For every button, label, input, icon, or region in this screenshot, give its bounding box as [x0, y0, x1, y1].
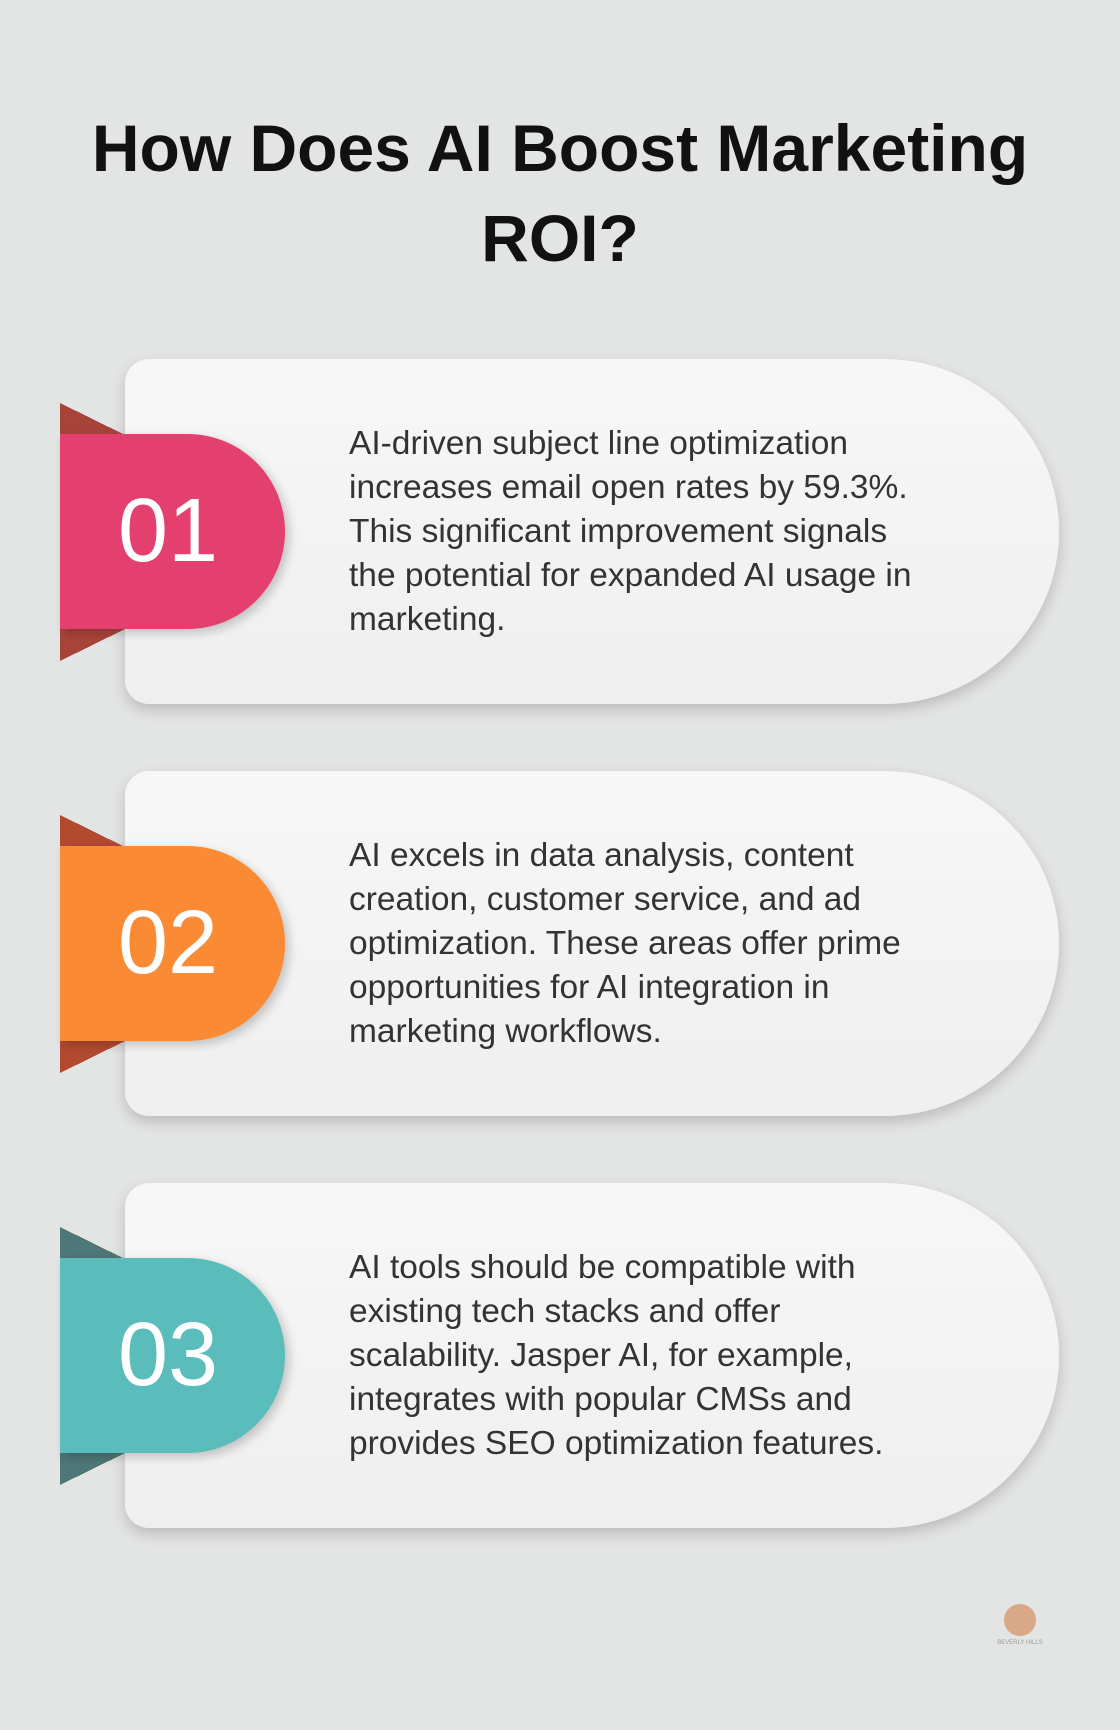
badge 01: 01 [118, 481, 218, 581]
flap top 03 [60, 1227, 125, 1259]
panel: item 02 [60, 771, 1065, 1128]
panel: item 03 [60, 1183, 1065, 1540]
text 02: optimization. These areas offer prime [349, 924, 901, 962]
flap bottom 01 [60, 629, 125, 661]
card 03 [125, 1183, 1059, 1528]
logo [997, 1604, 1043, 1646]
text 02: AI excels in data analysis, content [349, 836, 854, 874]
text 03: provides SEO optimization features. [349, 1424, 883, 1462]
text 02: creation, customer service, and ad [349, 880, 861, 918]
panel: item 01 [60, 359, 1065, 716]
text 03: existing tech stacks and offer [349, 1292, 780, 1330]
flap top 02 [60, 815, 125, 847]
badge 03: 03 [118, 1305, 218, 1405]
text 02 [349, 836, 901, 1050]
flap top 01 [60, 403, 125, 435]
text 02: marketing workflows. [349, 1012, 662, 1050]
text 01: This significant improvement signals [349, 512, 887, 550]
text 03: AI tools should be compatible with [349, 1248, 856, 1286]
badge 02: 02 [118, 893, 218, 993]
title: How Does AI Boost Marketing [92, 111, 1028, 185]
logo: BEVERLY HILLS [997, 1640, 1043, 1646]
text 03 [349, 1248, 883, 1462]
text 01: AI-driven subject line optimization [349, 424, 848, 462]
text 01: the potential for expanded AI usage in [349, 556, 911, 594]
text 01: marketing. [349, 600, 505, 638]
badge 01 [60, 434, 285, 629]
flap bottom 03 [60, 1453, 125, 1485]
text 03: scalability. Jasper AI, for example, [349, 1336, 853, 1374]
badge 02 [60, 846, 285, 1041]
card 01 [125, 359, 1059, 704]
title [92, 111, 1028, 275]
badge 03 [60, 1258, 285, 1453]
card 02 [125, 771, 1059, 1116]
text 02: opportunities for AI integration in [349, 968, 829, 1006]
flap bottom 02 [60, 1041, 125, 1073]
text 01 [349, 424, 911, 638]
title: ROI? [481, 201, 639, 275]
text 03: integrates with popular CMSs and [349, 1380, 852, 1418]
text 01: increases email open rates by 59.3%. [349, 468, 908, 506]
